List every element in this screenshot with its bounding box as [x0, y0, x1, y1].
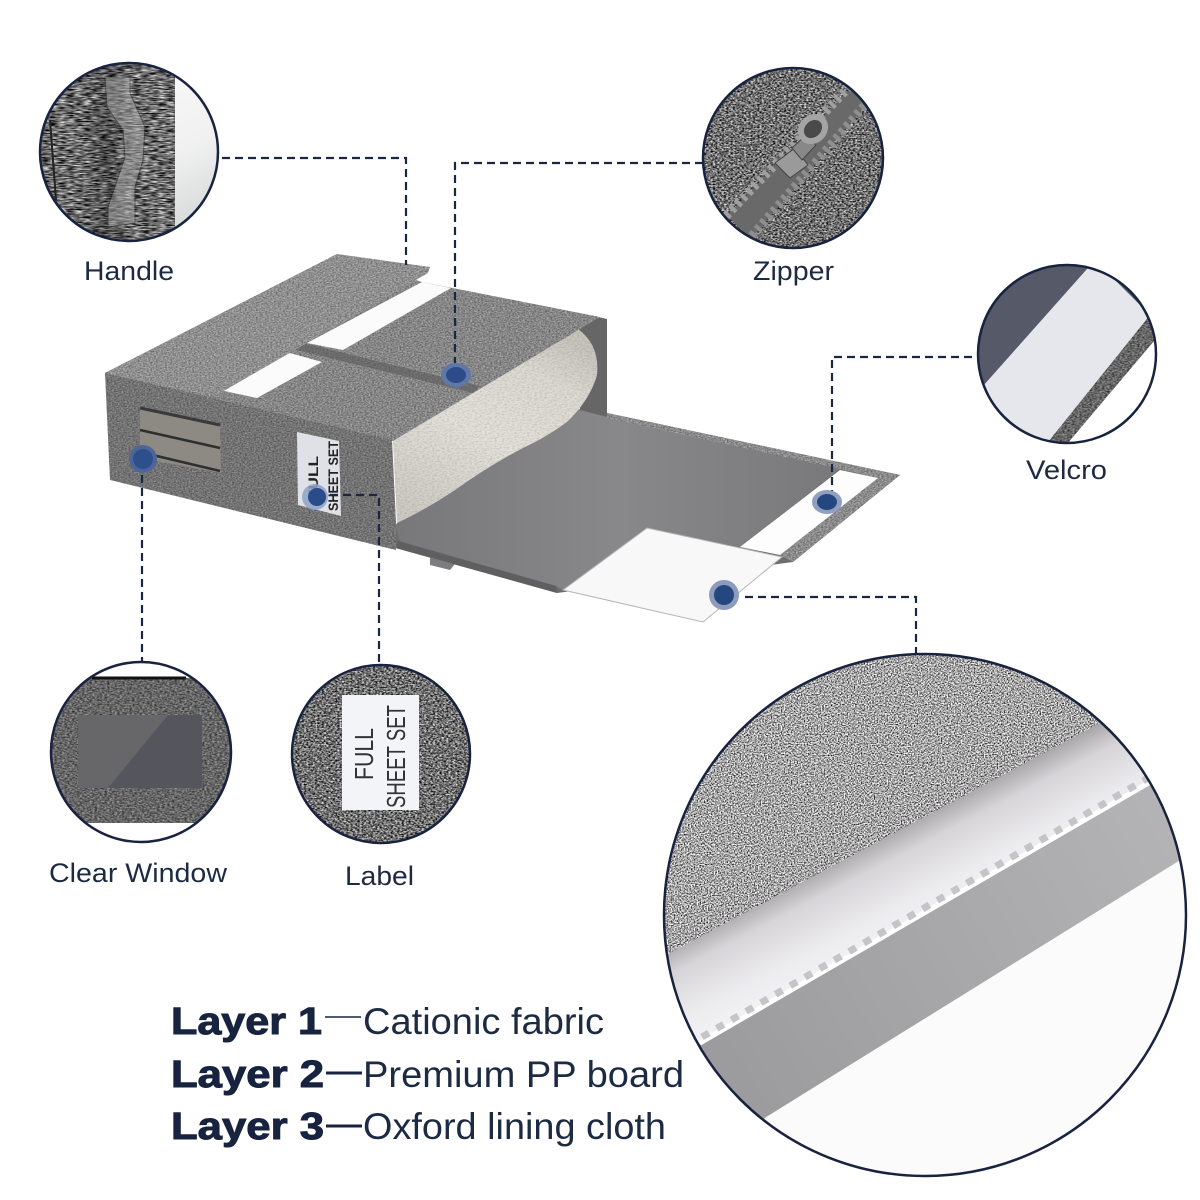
- layer 1: cationic fabric: [665, 655, 1100, 954]
- detail circle: zipper: [700, 65, 890, 255]
- marker dot: clear window: [129, 445, 157, 473]
- caption: Velcro: Velcro: [1026, 455, 1107, 485]
- velcro strip on lid: [740, 470, 878, 555]
- dashed leader: label: [330, 495, 379, 665]
- dashed leader: zipper: [455, 163, 703, 368]
- bedding inside box: [393, 329, 597, 523]
- caption: Zipper: Zipper: [753, 256, 834, 286]
- dashed leader: clear window: [141, 475, 143, 662]
- row: layer 2: [171, 1054, 684, 1096]
- front label card: FULL: [305, 455, 321, 500]
- detail circle: label: SHEET SET: [381, 705, 411, 808]
- front label card: SHEET SET: [325, 441, 341, 511]
- marker dot: zipper: [441, 363, 471, 387]
- row: layer 2: Layer 2: [171, 1054, 324, 1096]
- layer list text: [171, 1000, 684, 1148]
- caption: Label: Label: [345, 861, 414, 891]
- marker dot: label: [302, 484, 328, 510]
- caption: Clear Window: Clear Window: [49, 858, 228, 888]
- row: layer 3: [171, 1106, 666, 1148]
- corrugated board edge: [700, 778, 1150, 1043]
- layer 2: PP board: [668, 723, 1144, 1043]
- row: layer 2: Premium PP board: [363, 1054, 684, 1095]
- front label card: [297, 432, 341, 516]
- row: layer 1: Layer 1: [171, 1001, 322, 1043]
- back wall: [575, 317, 607, 417]
- row: layer 1: Cationic fabric: [363, 1001, 604, 1042]
- dashed leader: layers: [745, 597, 916, 655]
- detail circle: handle: [35, 60, 225, 250]
- detail circle: three material layers: [660, 650, 1190, 1180]
- box top face: [105, 254, 600, 441]
- white board flap: [563, 528, 782, 622]
- white velcro strips on top: [220, 282, 451, 398]
- row: layer 1: [171, 1001, 604, 1043]
- dashed leader: velcro: [832, 357, 972, 492]
- zipper strap: [296, 343, 480, 393]
- product: open storage box: [105, 254, 900, 622]
- lid outer edge: [397, 413, 900, 593]
- top flap: [105, 254, 430, 396]
- detail circle: clear window: [50, 660, 235, 845]
- marker dot: layers: [709, 580, 739, 610]
- row: layer 3: Layer 3: [171, 1106, 324, 1148]
- dashed leader: handle: [222, 158, 406, 265]
- detail circle: velcro: [976, 264, 1158, 444]
- layer 3: oxford lining cloth: [700, 785, 1179, 1118]
- marker dot: velcro: [812, 490, 842, 514]
- box front face: [105, 373, 396, 550]
- row: layer 3: Oxford lining cloth: [363, 1106, 666, 1147]
- front clear window: [140, 407, 221, 473]
- detail circle: label: [290, 662, 475, 847]
- open lid lining panel: [395, 405, 840, 590]
- detail circle: label: FULL: [349, 728, 379, 780]
- caption: Handle: Handle: [84, 256, 174, 286]
